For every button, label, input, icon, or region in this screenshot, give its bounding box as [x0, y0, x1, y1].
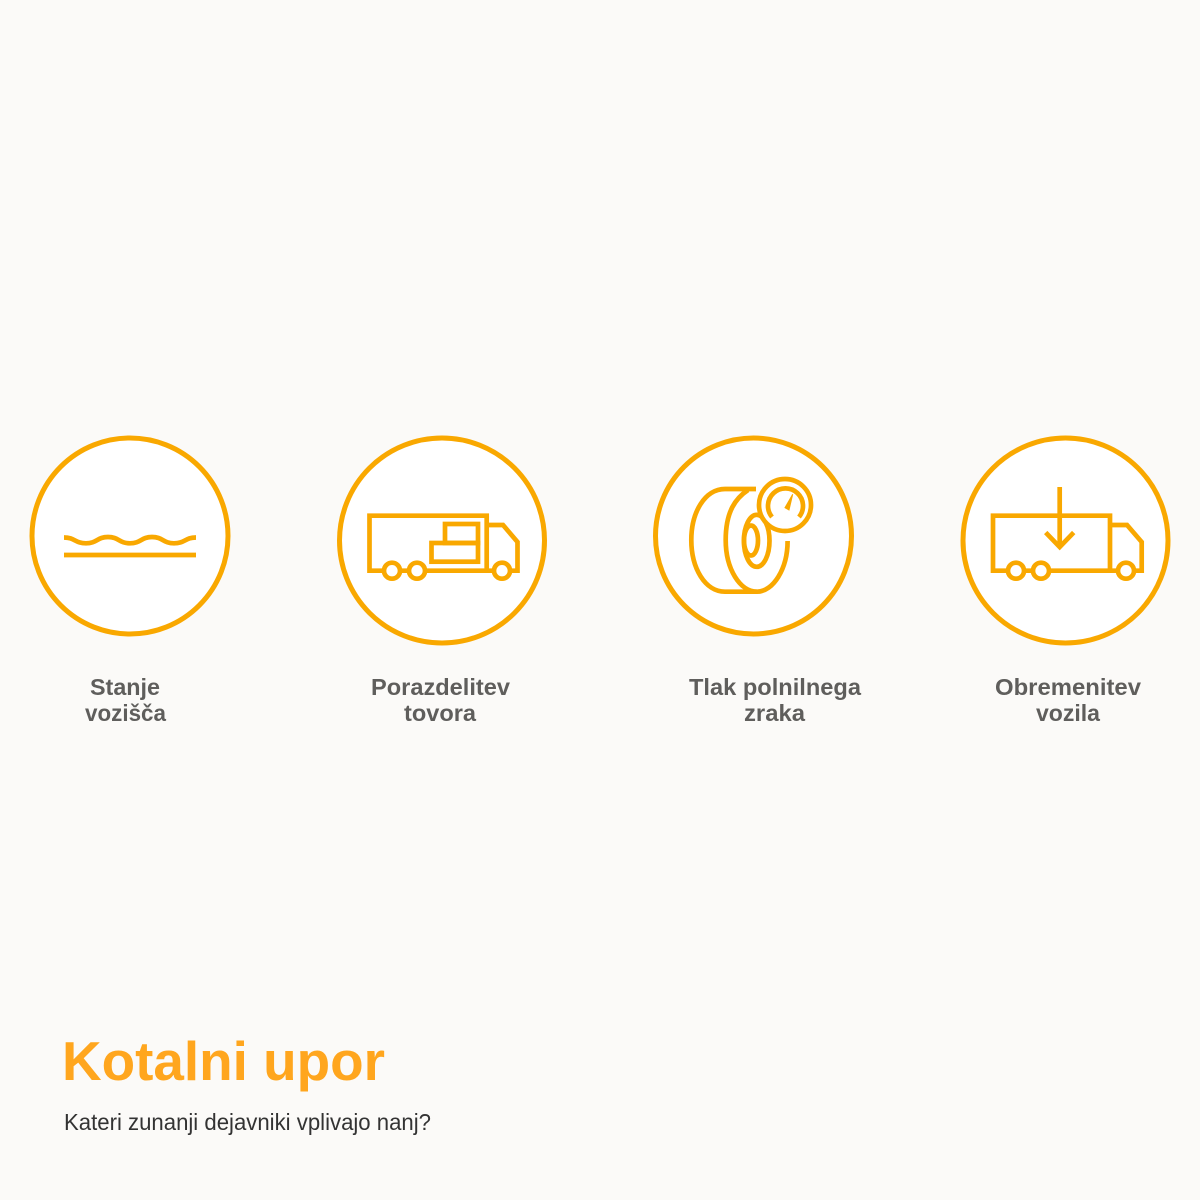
label: load distribution: tovora	[404, 700, 477, 726]
panel: inflation pressure	[656, 438, 862, 726]
panel: load distribution	[340, 438, 544, 726]
icon: tyre with pressure gauge	[656, 438, 852, 634]
label: vehicle load: Obremenitev	[995, 674, 1141, 700]
title: Kotalni upor	[62, 1030, 385, 1092]
panel: vehicle load	[963, 438, 1168, 726]
label: load distribution: Porazdelitev	[371, 674, 510, 700]
label: vehicle load	[995, 674, 1141, 726]
label: vehicle load: vozila	[1036, 700, 1101, 726]
label: road surface	[85, 674, 167, 726]
panel: road surface condition	[32, 438, 228, 726]
label: inflation pressure	[689, 674, 862, 726]
subtitle: Kateri zunanji dejavniki vplivajo nanj?	[64, 1109, 431, 1135]
label: inflation pressure: Tlak polnilnega	[689, 674, 862, 700]
icon: truck with cargo boxes	[340, 438, 544, 643]
label: inflation pressure: zraka	[744, 700, 806, 726]
label: load distribution	[371, 674, 510, 726]
icon: road surface	[32, 438, 228, 634]
icon: truck with downward arrow	[963, 438, 1168, 643]
label: road surface: vozišča	[85, 700, 167, 726]
label: road surface: Stanje	[90, 674, 160, 700]
